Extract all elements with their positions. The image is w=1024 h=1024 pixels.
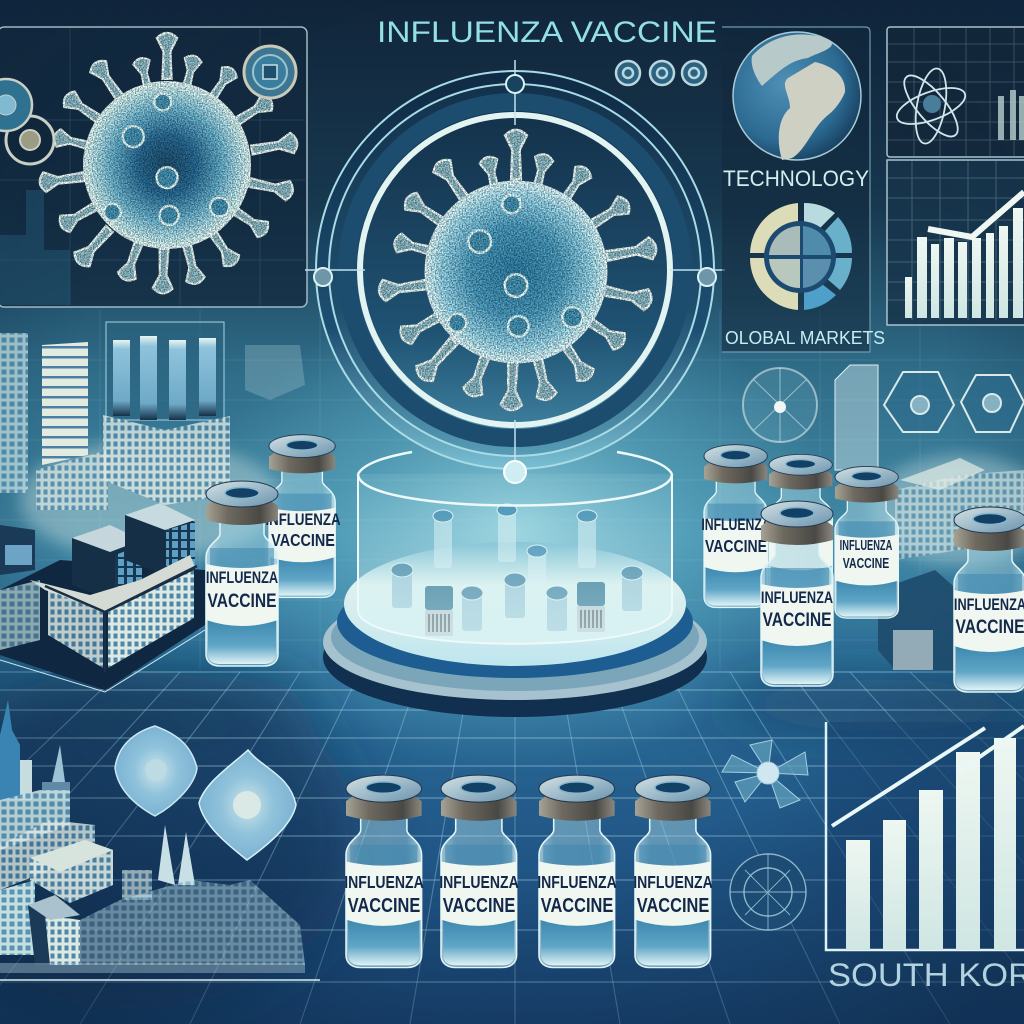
icons: top centre badges	[616, 61, 706, 85]
vial: left back	[265, 435, 341, 597]
glass cylinder	[358, 474, 672, 644]
bottom-right bar chart	[826, 722, 1024, 950]
vial: bottom row two: INFLUENZA	[439, 872, 519, 892]
vial: right front two: INFLUENZA	[954, 595, 1024, 615]
panel: top-left virus	[0, 27, 307, 307]
title: INFLUENZA VACCINE	[377, 16, 717, 49]
bars	[905, 208, 1023, 318]
small vials inside chamber	[391, 504, 643, 636]
city: bottom left	[0, 700, 320, 980]
panel: hexagon icons	[743, 368, 1024, 442]
icon: ring badges left	[0, 79, 54, 164]
vial: right back three: VACCINE	[843, 554, 890, 571]
vial: left front: VACCINE	[208, 590, 276, 611]
vial: bottom row two	[439, 775, 519, 968]
vial: left front	[206, 481, 278, 666]
vial: left front: INFLUENZA	[206, 568, 278, 588]
vial: bottom row one	[344, 775, 424, 968]
icon: shield left	[115, 726, 197, 816]
buildings: right side	[835, 365, 1024, 670]
vial: bottom row one: INFLUENZA	[344, 872, 424, 892]
vial: bottom row three	[537, 775, 617, 968]
virus illustration	[38, 33, 299, 294]
buildings: isometric block left	[0, 503, 205, 692]
vial: right back one	[701, 445, 771, 607]
label: south korea: SOUTH KOR	[828, 957, 1024, 993]
vial: left back: VACCINE	[271, 531, 335, 550]
vial: bottom row three: VACCINE	[541, 893, 613, 916]
vial: right back two	[769, 454, 832, 602]
vial: right front two: VACCINE	[956, 616, 1024, 637]
vial: right front two	[954, 507, 1024, 692]
vial: right front one	[761, 501, 833, 686]
icon: donut chart	[750, 203, 852, 310]
mid-zone faint grid	[0, 310, 1024, 670]
central glow	[195, 290, 835, 770]
glass chamber	[323, 452, 707, 717]
central ring device	[305, 60, 725, 483]
bars	[846, 738, 1016, 950]
vial: bottom row four: VACCINE	[637, 893, 709, 916]
buildings: upper left	[0, 322, 305, 560]
glowing bars	[998, 90, 1024, 140]
vial: right front one: INFLUENZA	[761, 588, 833, 608]
vial: right back three	[835, 466, 898, 618]
panel: top-right bar chart	[887, 160, 1024, 325]
icon: ring badge top right	[244, 46, 296, 98]
icon: flower molecule	[722, 740, 808, 808]
floor grid	[0, 672, 1024, 1024]
vial: bottom row four: INFLUENZA	[633, 872, 713, 892]
vial: bottom row four	[633, 775, 713, 968]
chamber base	[323, 542, 707, 717]
label: global markets: OLOBAL MARKETS	[725, 328, 885, 348]
vial: left back: INFLUENZA	[265, 511, 341, 529]
icon: globe	[733, 32, 861, 160]
trend arrows	[832, 728, 985, 826]
vial: bottom row two: VACCINE	[443, 893, 515, 916]
icon: atom	[892, 66, 970, 146]
vial: right back three: INFLUENZA	[840, 537, 892, 554]
icon: circular emblem	[730, 854, 806, 930]
floor shading	[0, 670, 1024, 1010]
trend arrow	[928, 192, 1024, 237]
icon: shield right	[199, 750, 296, 860]
vial: right back one: INFLUENZA	[701, 516, 771, 535]
faint skyline in panel	[0, 190, 70, 305]
vial: right back one: VACCINE	[705, 536, 767, 556]
label: technology: TECHNOLOGY	[723, 166, 869, 191]
central virus	[378, 130, 658, 411]
vial: right front one: VACCINE	[763, 609, 831, 630]
vial: bottom row three: INFLUENZA	[537, 872, 617, 892]
panel: atom diagram	[887, 27, 1024, 157]
panel: globe and technology	[722, 27, 885, 352]
vial: bottom row one: VACCINE	[348, 893, 420, 916]
